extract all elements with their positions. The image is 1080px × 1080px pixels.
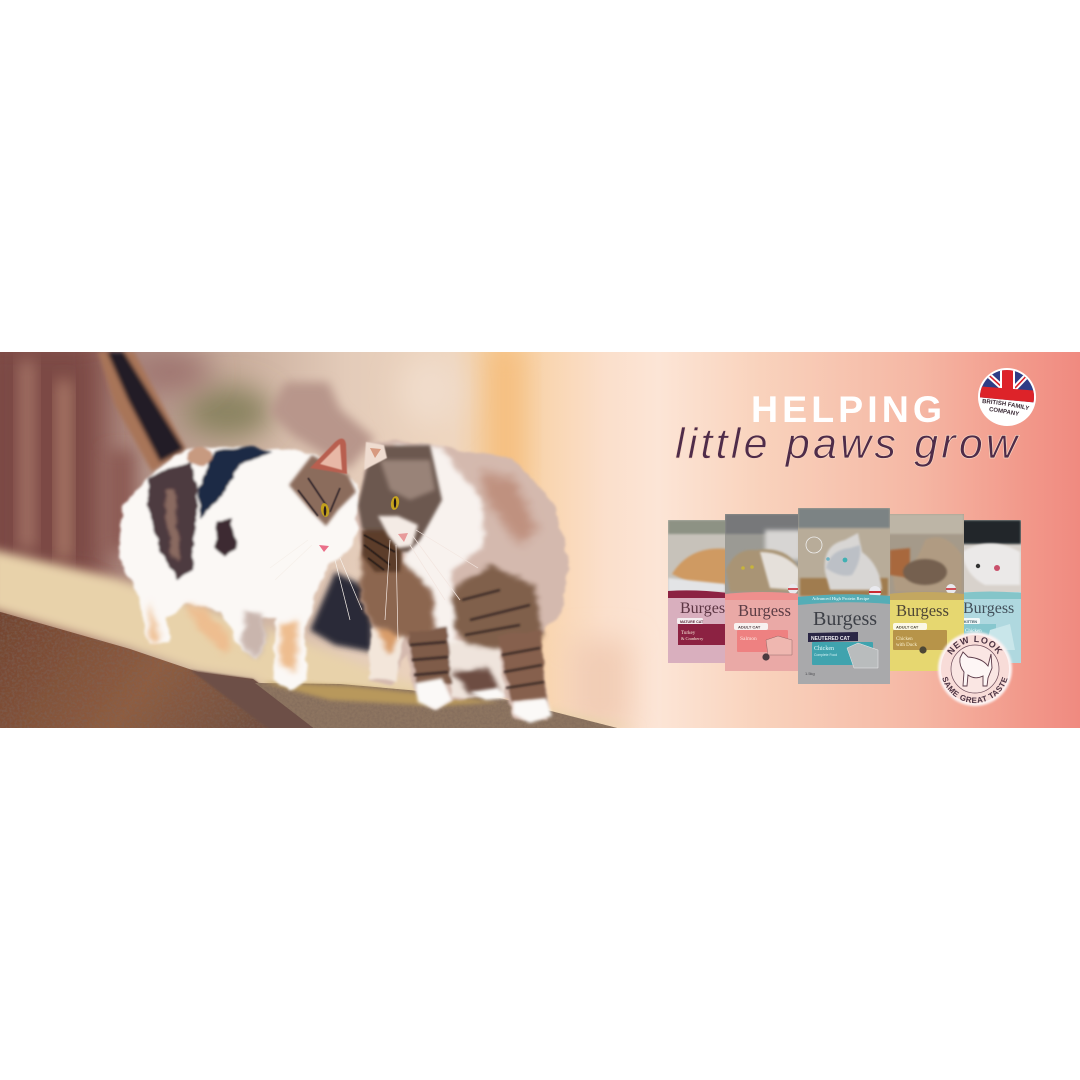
bag flag sticker (946, 584, 956, 594)
product bag: mature cat turkey: & Cranberry (681, 636, 704, 641)
dark shadow between cats (310, 572, 372, 652)
product bag: kitten (960, 520, 1021, 663)
white and tabby cat (98, 352, 362, 690)
product bag: kitten: Chicken (965, 629, 982, 634)
bag label (893, 623, 927, 630)
back fur shading (480, 470, 538, 545)
bag label (677, 618, 703, 624)
product bag: neutered cat chicken: Complete Food (814, 653, 837, 657)
bag flag sticker (869, 586, 881, 598)
blurred garden background (0, 340, 630, 730)
head (358, 445, 442, 552)
product bag: adult cat chicken with duck (888, 514, 964, 671)
bag label (734, 623, 768, 630)
bag band (668, 590, 728, 598)
product bag: mature cat turkey: Turkey (681, 631, 696, 636)
fluffy tabby cat (356, 439, 569, 723)
product bag: mature cat turkey (668, 520, 731, 663)
badge: new look same great taste: NEW LOOK (947, 636, 1003, 655)
cat silhouette outline (960, 652, 992, 686)
bag band (798, 594, 890, 605)
bag photo: ragdoll cat (825, 533, 882, 590)
bag label (808, 632, 858, 642)
product bag: adult cat salmon: Salmon (740, 636, 757, 642)
product bag: kitten: KITTEN (964, 620, 977, 624)
eye (320, 503, 330, 517)
bag logo: Burgess (680, 600, 731, 617)
bag band (960, 592, 1021, 599)
bag logo: Burgess (963, 600, 1014, 617)
product bag: neutered cat chicken: NEUTERED CAT (811, 636, 850, 642)
whiskers (385, 530, 478, 640)
product bag: neutered cat chicken: 1.5kg (805, 671, 815, 676)
white paws (415, 678, 552, 723)
product bag: mature cat turkey: MATURE CAT (680, 620, 704, 624)
left leg (368, 626, 405, 680)
bag photo: white kitten (962, 544, 1020, 585)
ear (310, 438, 347, 474)
tabby stripes (410, 590, 544, 688)
tail (98, 352, 186, 472)
eye (390, 496, 400, 510)
brown chest tabby (360, 552, 436, 640)
bag flag sticker (788, 584, 798, 594)
product bag: adult cat salmon (725, 514, 801, 671)
product bag: adult cat chicken with duck: with Duck (896, 643, 917, 648)
photo: two cats on a wall (0, 340, 640, 735)
wall foreground ledge (255, 683, 625, 730)
bag logo: Burgess (738, 601, 791, 620)
badge: new look same great taste: SAME GREAT TASTE (942, 676, 1008, 704)
wall top surface (0, 549, 640, 728)
bag band (888, 592, 964, 600)
tabby flank (450, 565, 543, 650)
bag label (962, 618, 980, 624)
product bag: neutered cat chicken: Advanced High Protein Recipe (812, 596, 869, 601)
inner pale legs (448, 640, 505, 698)
chest and ruff (395, 445, 484, 645)
ear (364, 442, 387, 470)
badge: British Family Company: COMPANY (989, 407, 1020, 416)
fur coat (119, 446, 360, 690)
nose (319, 545, 329, 552)
heading: little paws grow: little paws grow (675, 420, 1020, 468)
badge: new look same great taste (936, 630, 1014, 708)
bag photo: tabby cat (726, 549, 800, 592)
badge: British Family Company (978, 368, 1036, 426)
product bag: neutered cat chicken (798, 508, 890, 684)
heading: HELPING: HELPING (751, 388, 942, 430)
whiskers (270, 540, 362, 620)
product bag: adult cat chicken with duck: Chicken (896, 637, 913, 642)
bag photo: tabby cat (892, 537, 962, 592)
banner background gradient (0, 352, 1080, 728)
bag photo: ginger cat (672, 549, 728, 585)
product bag: neutered cat chicken: Chicken (814, 646, 834, 652)
product bag: adult cat salmon: ADULT CAT (738, 624, 761, 630)
bag logo: Burgess (896, 601, 949, 620)
bag logo: Burgess (813, 608, 877, 630)
product bag: adult cat chicken with duck: ADULT CAT (896, 624, 919, 630)
badge: British Family Company: BRITISH FAMILY (982, 398, 1030, 410)
tabby head cap (289, 455, 356, 526)
bag band (725, 592, 801, 600)
blurred third cat behind (269, 382, 375, 470)
muzzle (378, 516, 418, 548)
fur coat (356, 439, 569, 719)
front leg (407, 628, 452, 688)
rear leg (497, 630, 546, 702)
bag seal (806, 537, 822, 553)
wall front face (0, 612, 270, 728)
